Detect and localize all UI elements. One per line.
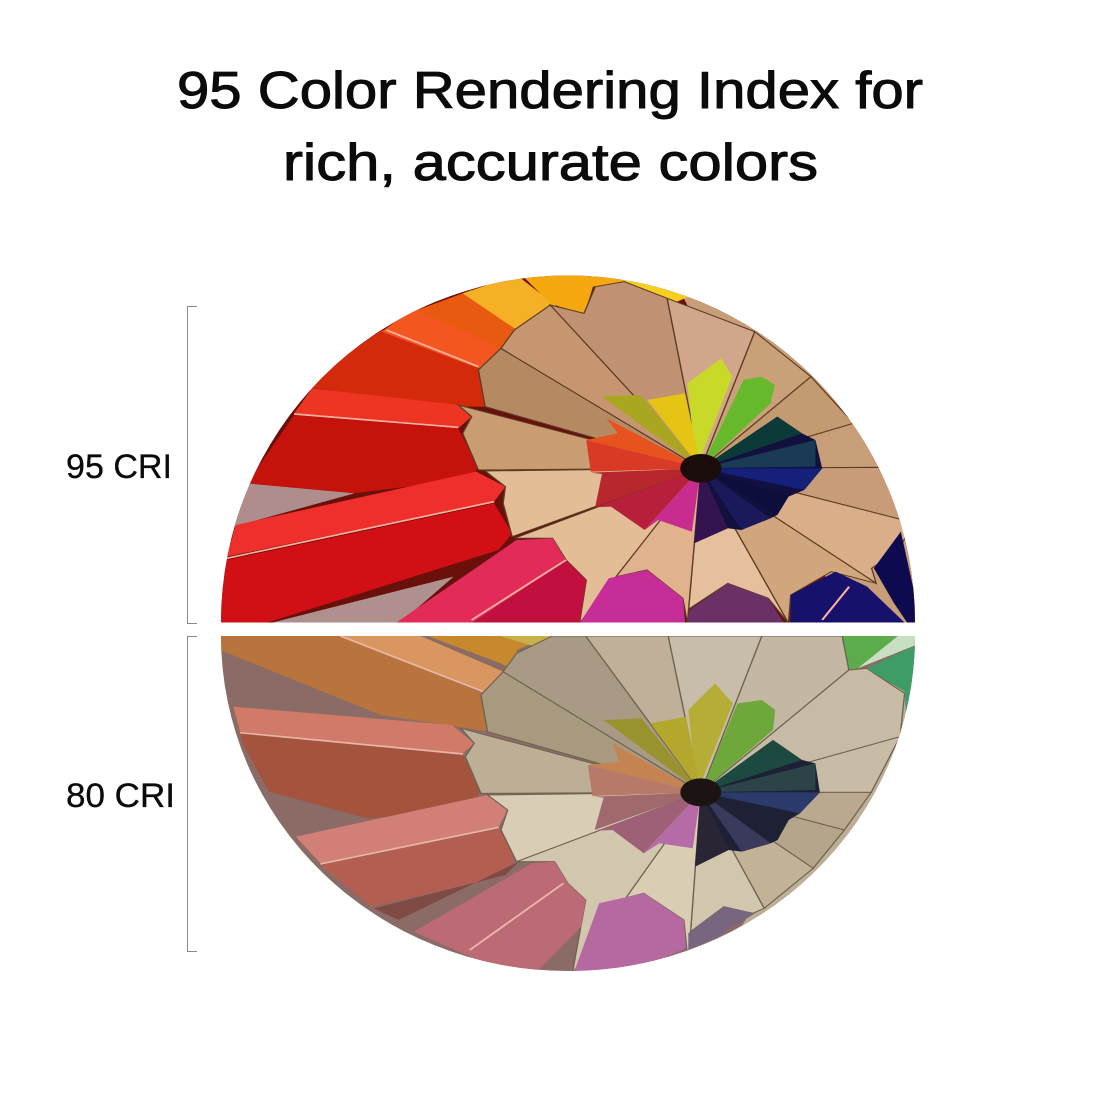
bracket: 95 CRI (188, 306, 197, 624)
label: 95 CRI: 95 CRI (66, 448, 172, 486)
photo: pencils under 80 CRI light (220, 635, 920, 977)
photo: pencils under 95 CRI light (218, 270, 926, 627)
label: 80 CRI: 80 CRI (66, 777, 175, 815)
bracket: 80 CRI (188, 636, 197, 952)
title: rich, accurate colors (283, 134, 818, 192)
title (177, 62, 923, 192)
title: 95 Color Rendering Index for (177, 62, 923, 120)
